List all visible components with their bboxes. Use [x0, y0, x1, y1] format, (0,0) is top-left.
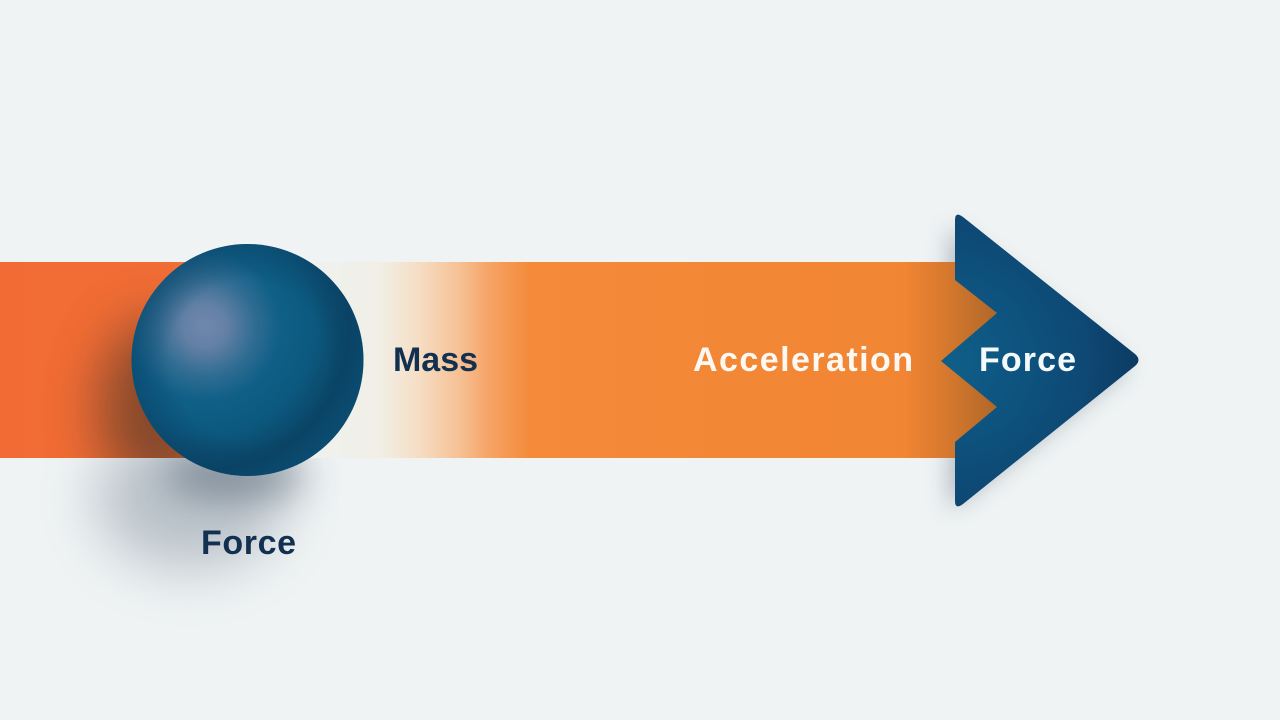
label: force below sphere: Force: [201, 524, 296, 562]
label: acceleration: Acceleration: [693, 341, 913, 379]
sphere floor shadow: [95, 426, 307, 570]
sphere: [132, 244, 364, 476]
arrowhead: [941, 215, 1138, 506]
label: force on arrow: Force: [979, 341, 1076, 379]
infographic: force, mass and acceleration: [0, 214, 1138, 594]
label: mass: Mass: [393, 341, 478, 379]
orange motion band: [0, 262, 997, 458]
arrowhead drop shadow: [936, 227, 1129, 510]
